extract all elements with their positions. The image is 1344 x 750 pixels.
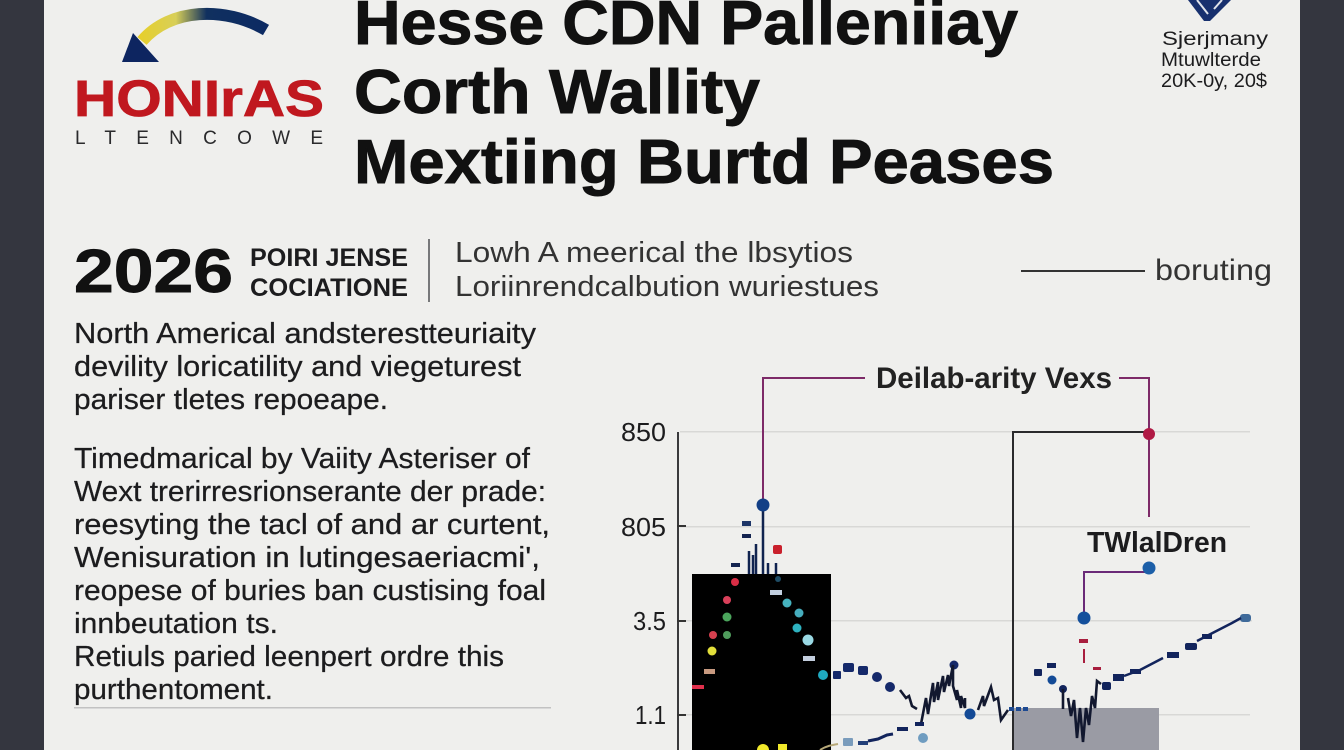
icon: shield emblem xyxy=(1188,0,1231,21)
y axis labels: 805 xyxy=(621,512,666,542)
y axis labels: 850 xyxy=(621,417,666,447)
year: 2026 xyxy=(74,237,233,305)
chart xyxy=(621,362,1252,750)
callout: trend label xyxy=(1078,527,1227,624)
emblem and date text: Sjerjmany xyxy=(1162,29,1269,50)
intro text block xyxy=(74,318,537,416)
y axis labels: 1.1 xyxy=(635,700,666,730)
title xyxy=(354,0,1054,197)
intro text block: pariser tletes repoeape. xyxy=(74,384,388,416)
y axis xyxy=(677,431,1252,750)
logo wordmark: HONIrAS xyxy=(74,70,324,127)
callout: deliverability label: Deilab-arity Vexs xyxy=(876,362,1112,395)
black bar xyxy=(692,574,831,750)
gray bar xyxy=(1014,708,1159,750)
subtitle: Lowh A meerical the lbsytios xyxy=(455,237,853,269)
category label: COCIATIONE xyxy=(250,274,408,302)
right series rising line xyxy=(1034,614,1251,742)
callout: trend label: TWlalDren xyxy=(1087,527,1227,559)
body text block: reopese of buries ban custising foal xyxy=(74,575,546,607)
intro text block: devility loricatility and viegeturest xyxy=(74,351,521,383)
body text block: reesyting the tacl of and ar curtent, xyxy=(74,509,550,541)
vertical marker line xyxy=(1013,432,1149,750)
icon: logo triangle xyxy=(122,33,159,62)
body text block: Timedmarical by Vaiity Asteriser of xyxy=(74,443,531,475)
body text block: Retiuls paried leenpert ordre this xyxy=(74,641,504,673)
body text block: Wext trerirresrionserante der prade: xyxy=(74,476,546,508)
subtitle: Loriinrendcalbution wuriestues xyxy=(455,271,879,303)
y axis labels xyxy=(621,417,666,730)
body text block: purthentoment. xyxy=(74,674,273,706)
y axis labels: 3.5 xyxy=(633,606,666,636)
peak spikes above black bar xyxy=(749,505,776,574)
emblem and date text xyxy=(1161,29,1269,92)
top-right emblem and date xyxy=(1161,0,1269,92)
body text block: innbeutation ts. xyxy=(74,608,278,640)
logo xyxy=(74,14,324,149)
lower line series xyxy=(820,722,928,750)
callout: deliverability label xyxy=(763,362,1155,517)
icon: logo arc xyxy=(142,14,266,41)
markers above black bar xyxy=(731,498,782,567)
right legend label: boruting xyxy=(1155,254,1272,287)
title: Corth Wallity xyxy=(354,58,761,127)
category label xyxy=(250,244,408,302)
emblem and date text: Mtuwlterde xyxy=(1161,50,1261,71)
dark blue upper line series xyxy=(833,660,1028,724)
logo subtitle: LTENCOWE xyxy=(75,128,323,149)
coloured markers inside black bar xyxy=(692,576,828,750)
intro text block: North Americal andsterestteuriaity xyxy=(74,318,537,350)
subtitle xyxy=(455,237,879,303)
emblem and date text: 20K-0y, 20$ xyxy=(1161,71,1267,92)
body text block xyxy=(74,443,550,706)
year and category heading xyxy=(74,237,408,305)
small red dashes xyxy=(1079,639,1101,670)
category label: POIRI JENSE xyxy=(250,244,408,272)
body text block: Wenisuration in lutingesaeriacmi', xyxy=(74,542,540,574)
title: Mextiing Burtd Peases xyxy=(354,128,1054,197)
